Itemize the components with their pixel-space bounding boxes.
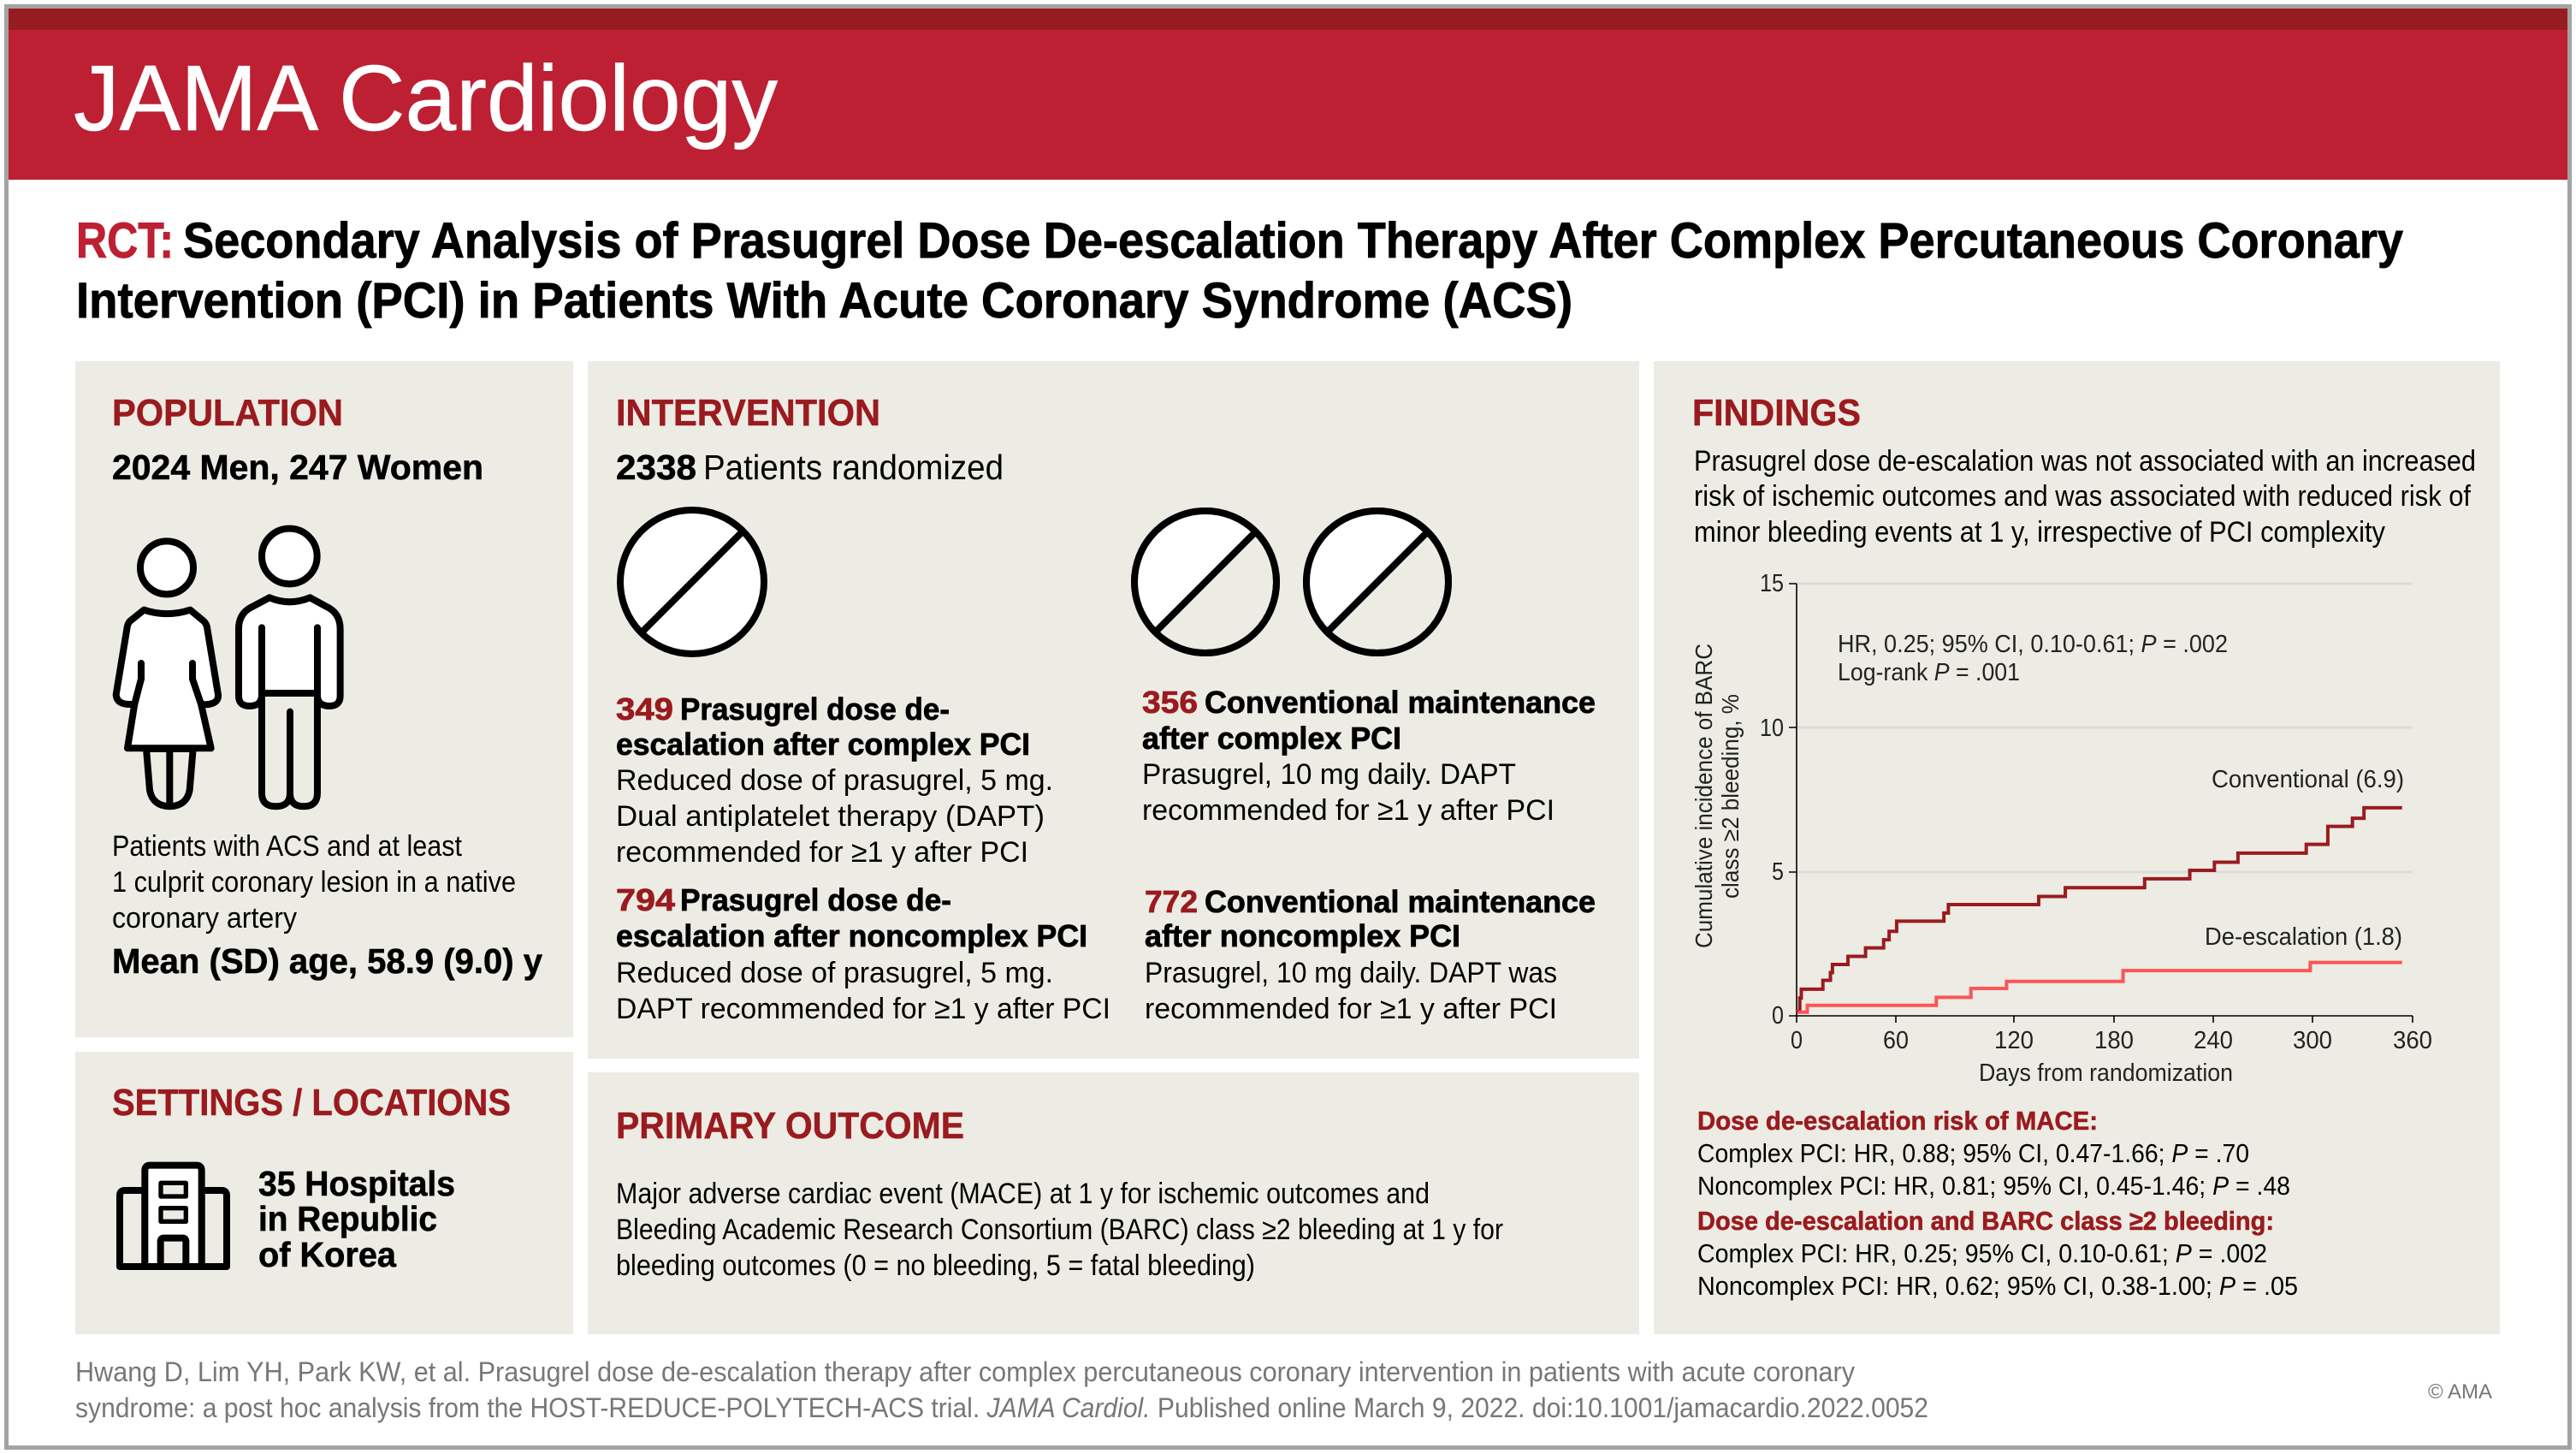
findings summary: risk of ischemic outcomes and was associated with reduced risk of [1694,480,2471,513]
participant counts: 2024 Men, 247 Women [112,448,483,487]
x axis labels: 120 [1994,1027,2034,1054]
population description: 1 culprit coronary lesion in a native [112,866,516,899]
line chart: cumulative incidence of bleeding [1691,570,2432,1087]
findings summary: minor bleeding events at 1 y, irrespective of PCI complexity [1694,516,2386,549]
citation [75,1356,1928,1423]
arm: conventional noncomplex PCI: recommended for ≥1 y after PCI [1145,993,1557,1025]
MACE results: Complex PCI: HR, 0.88; 95% CI, 0.47-1.66; P = .70 [1697,1138,2249,1168]
arm: conventional noncomplex PCI: Conventional maintenance [1205,884,1596,919]
de-escalation label: De-escalation (1.8) [2205,923,2402,951]
MACE results: Noncomplex PCI: HR, 0.81; 95% CI, 0.45-1.46; P = .48 [1697,1171,2290,1201]
patients randomized: Patients randomized [703,448,1004,487]
chart statistics: Log-rank P = .001 [1838,659,2020,686]
conventional label: Conventional (6.9) [2212,766,2404,793]
primary outcome description [616,1178,1503,1282]
panel: population [75,361,573,1037]
title: Intervention (PCI) in Patients With Acute Coronary Syndrome (ACS) [76,273,1572,329]
arm: de-escalation noncomplex PCI: Reduced dose of prasugrel, 5 mg. [616,957,1053,989]
hospitals count [258,1164,455,1274]
arm: de-escalation complex PCI: Prasugrel dose de- [680,691,950,727]
bleeding results [1697,1206,2298,1301]
y axis labels [1760,570,1784,1030]
arm: conventional complex PCI: Conventional maintenance [1205,685,1596,720]
x axis labels: 180 [2094,1027,2134,1054]
arm: de-escalation complex PCI: escalation after complex PCI [616,727,1030,762]
primary outcome heading: PRIMARY OUTCOME [616,1105,964,1147]
panel: settings and locations [75,1052,573,1334]
x axis title: Days from randomization [1979,1059,2233,1087]
hospitals count: in Republic [258,1199,437,1238]
arm: conventional complex PCI: 356 [1142,685,1198,720]
icon: woman and man [116,529,341,806]
icon: conventional pill [1134,511,1276,653]
panel: intervention [588,361,1639,1059]
y axis labels: 0 [1772,1002,1784,1030]
x axis labels [1791,1027,2432,1054]
findings heading: FINDINGS [1692,392,1861,434]
y axis labels: 5 [1772,858,1784,886]
header banner [9,9,2567,180]
population description: Patients with ACS and at least [112,830,462,863]
settings heading: SETTINGS / LOCATIONS [112,1082,511,1124]
primary outcome description: bleeding outcomes (0 = no bleeding, 5 = fatal bleeding) [616,1249,1255,1282]
arm: de-escalation complex PCI: Dual antiplatelet therapy (DAPT) [616,800,1045,833]
citation: syndrome: a post hoc analysis from the HOST-REDUCE-POLYTECH-ACS trial. JAMA Cardiol. Published online March 9, 2022. doi:10.1001/jamacardio.2022.0052 [75,1392,1928,1423]
arm: de-escalation complex PCI [616,691,1053,869]
arm: de-escalation complex PCI: Reduced dose of prasugrel, 5 mg. [616,764,1053,797]
title [76,213,2403,329]
arm: de-escalation noncomplex PCI [616,882,1110,1025]
citation: Hwang D, Lim YH, Park KW, et al. Prasugrel dose de-escalation therapy after complex percutaneous coronary intervention in patients with acute coronary [75,1356,1855,1387]
de-escalation curve [1797,963,2402,1012]
arm: de-escalation noncomplex PCI: DAPT recommended for ≥1 y after PCI [616,993,1110,1025]
x axis labels: 240 [2194,1027,2233,1054]
y axis labels: 15 [1760,570,1784,597]
arm: de-escalation noncomplex PCI: 794 [616,882,676,917]
arm: de-escalation complex PCI: 349 [616,691,673,727]
journal name: JAMA Cardiology [74,46,778,151]
arm: de-escalation complex PCI: recommended for ≥1 y after PCI [616,836,1028,869]
arm: conventional noncomplex PCI: Prasugrel, 10 mg daily. DAPT was [1145,957,1557,989]
x axis labels: 300 [2293,1027,2332,1054]
intervention heading: INTERVENTION [616,392,880,434]
chart statistics: HR, 0.25; 95% CI, 0.10-0.61; P = .002 [1838,631,2228,658]
arm: conventional noncomplex PCI: 772 [1145,884,1198,919]
MACE results: Dose de-escalation risk of MACE: [1697,1106,2098,1136]
primary outcome description: Major adverse cardiac event (MACE) at 1 y for ischemic outcomes and [616,1178,1430,1210]
title: Secondary Analysis of Prasugrel Dose De-escalation Therapy After Complex Percutaneous Coronary [183,213,2403,269]
y axis title: class ≥2 bleeding, % [1717,694,1744,899]
icon: prasugrel half dose pill [620,510,764,654]
bleeding results: Dose de-escalation and BARC class ≥2 bleeding: [1697,1206,2274,1236]
hospitals count: of Korea [258,1235,397,1274]
panel: findings [1654,361,2500,1334]
copyright: © AMA [2428,1380,2492,1404]
patients randomized: 2338 [616,448,696,487]
arm: conventional complex PCI: recommended for ≥1 y after PCI [1142,794,1554,827]
x axis labels: 0 [1791,1027,1803,1054]
arm: conventional complex PCI [1142,685,1596,827]
arm: conventional noncomplex PCI [1145,884,1596,1025]
icon: hospital building [120,1166,227,1267]
y axis labels: 10 [1760,715,1784,742]
mean age: Mean (SD) age, 58.9 (9.0) y [112,941,542,981]
arm: de-escalation noncomplex PCI: escalation after noncomplex PCI [616,918,1087,953]
y axis title: Cumulative incidence of BARC [1691,644,1717,948]
panel: primary outcome [588,1072,1639,1334]
conventional curve [1797,808,2402,1012]
arm: conventional noncomplex PCI: after noncomplex PCI [1145,918,1460,953]
chart statistics [1838,631,2228,686]
population description: coronary artery [112,902,298,935]
arm: de-escalation noncomplex PCI: Prasugrel dose de- [680,882,951,917]
primary outcome description: Bleeding Academic Research Consortium (BARC) class ≥2 bleeding at 1 y for [616,1214,1503,1246]
x axis labels: 360 [2393,1027,2432,1054]
MACE results [1697,1106,2290,1201]
arm: conventional complex PCI: Prasugrel, 10 mg daily. DAPT [1142,758,1516,791]
icon: conventional pill second [1306,511,1448,653]
population description [112,830,516,935]
findings summary: Prasugrel dose de-escalation was not associated with an increased [1694,445,2476,478]
x axis labels: 60 [1883,1027,1909,1054]
bleeding results: Complex PCI: HR, 0.25; 95% CI, 0.10-0.61; P = .002 [1697,1238,2267,1268]
population heading: POPULATION [112,392,343,434]
title: RCT: [76,213,174,269]
hospitals count: 35 Hospitals [258,1164,455,1203]
arm: conventional complex PCI: after complex PCI [1142,721,1401,756]
y axis title [1691,644,1744,948]
bleeding results: Noncomplex PCI: HR, 0.62; 95% CI, 0.38-1.00; P = .05 [1697,1271,2298,1301]
findings summary [1694,445,2476,549]
